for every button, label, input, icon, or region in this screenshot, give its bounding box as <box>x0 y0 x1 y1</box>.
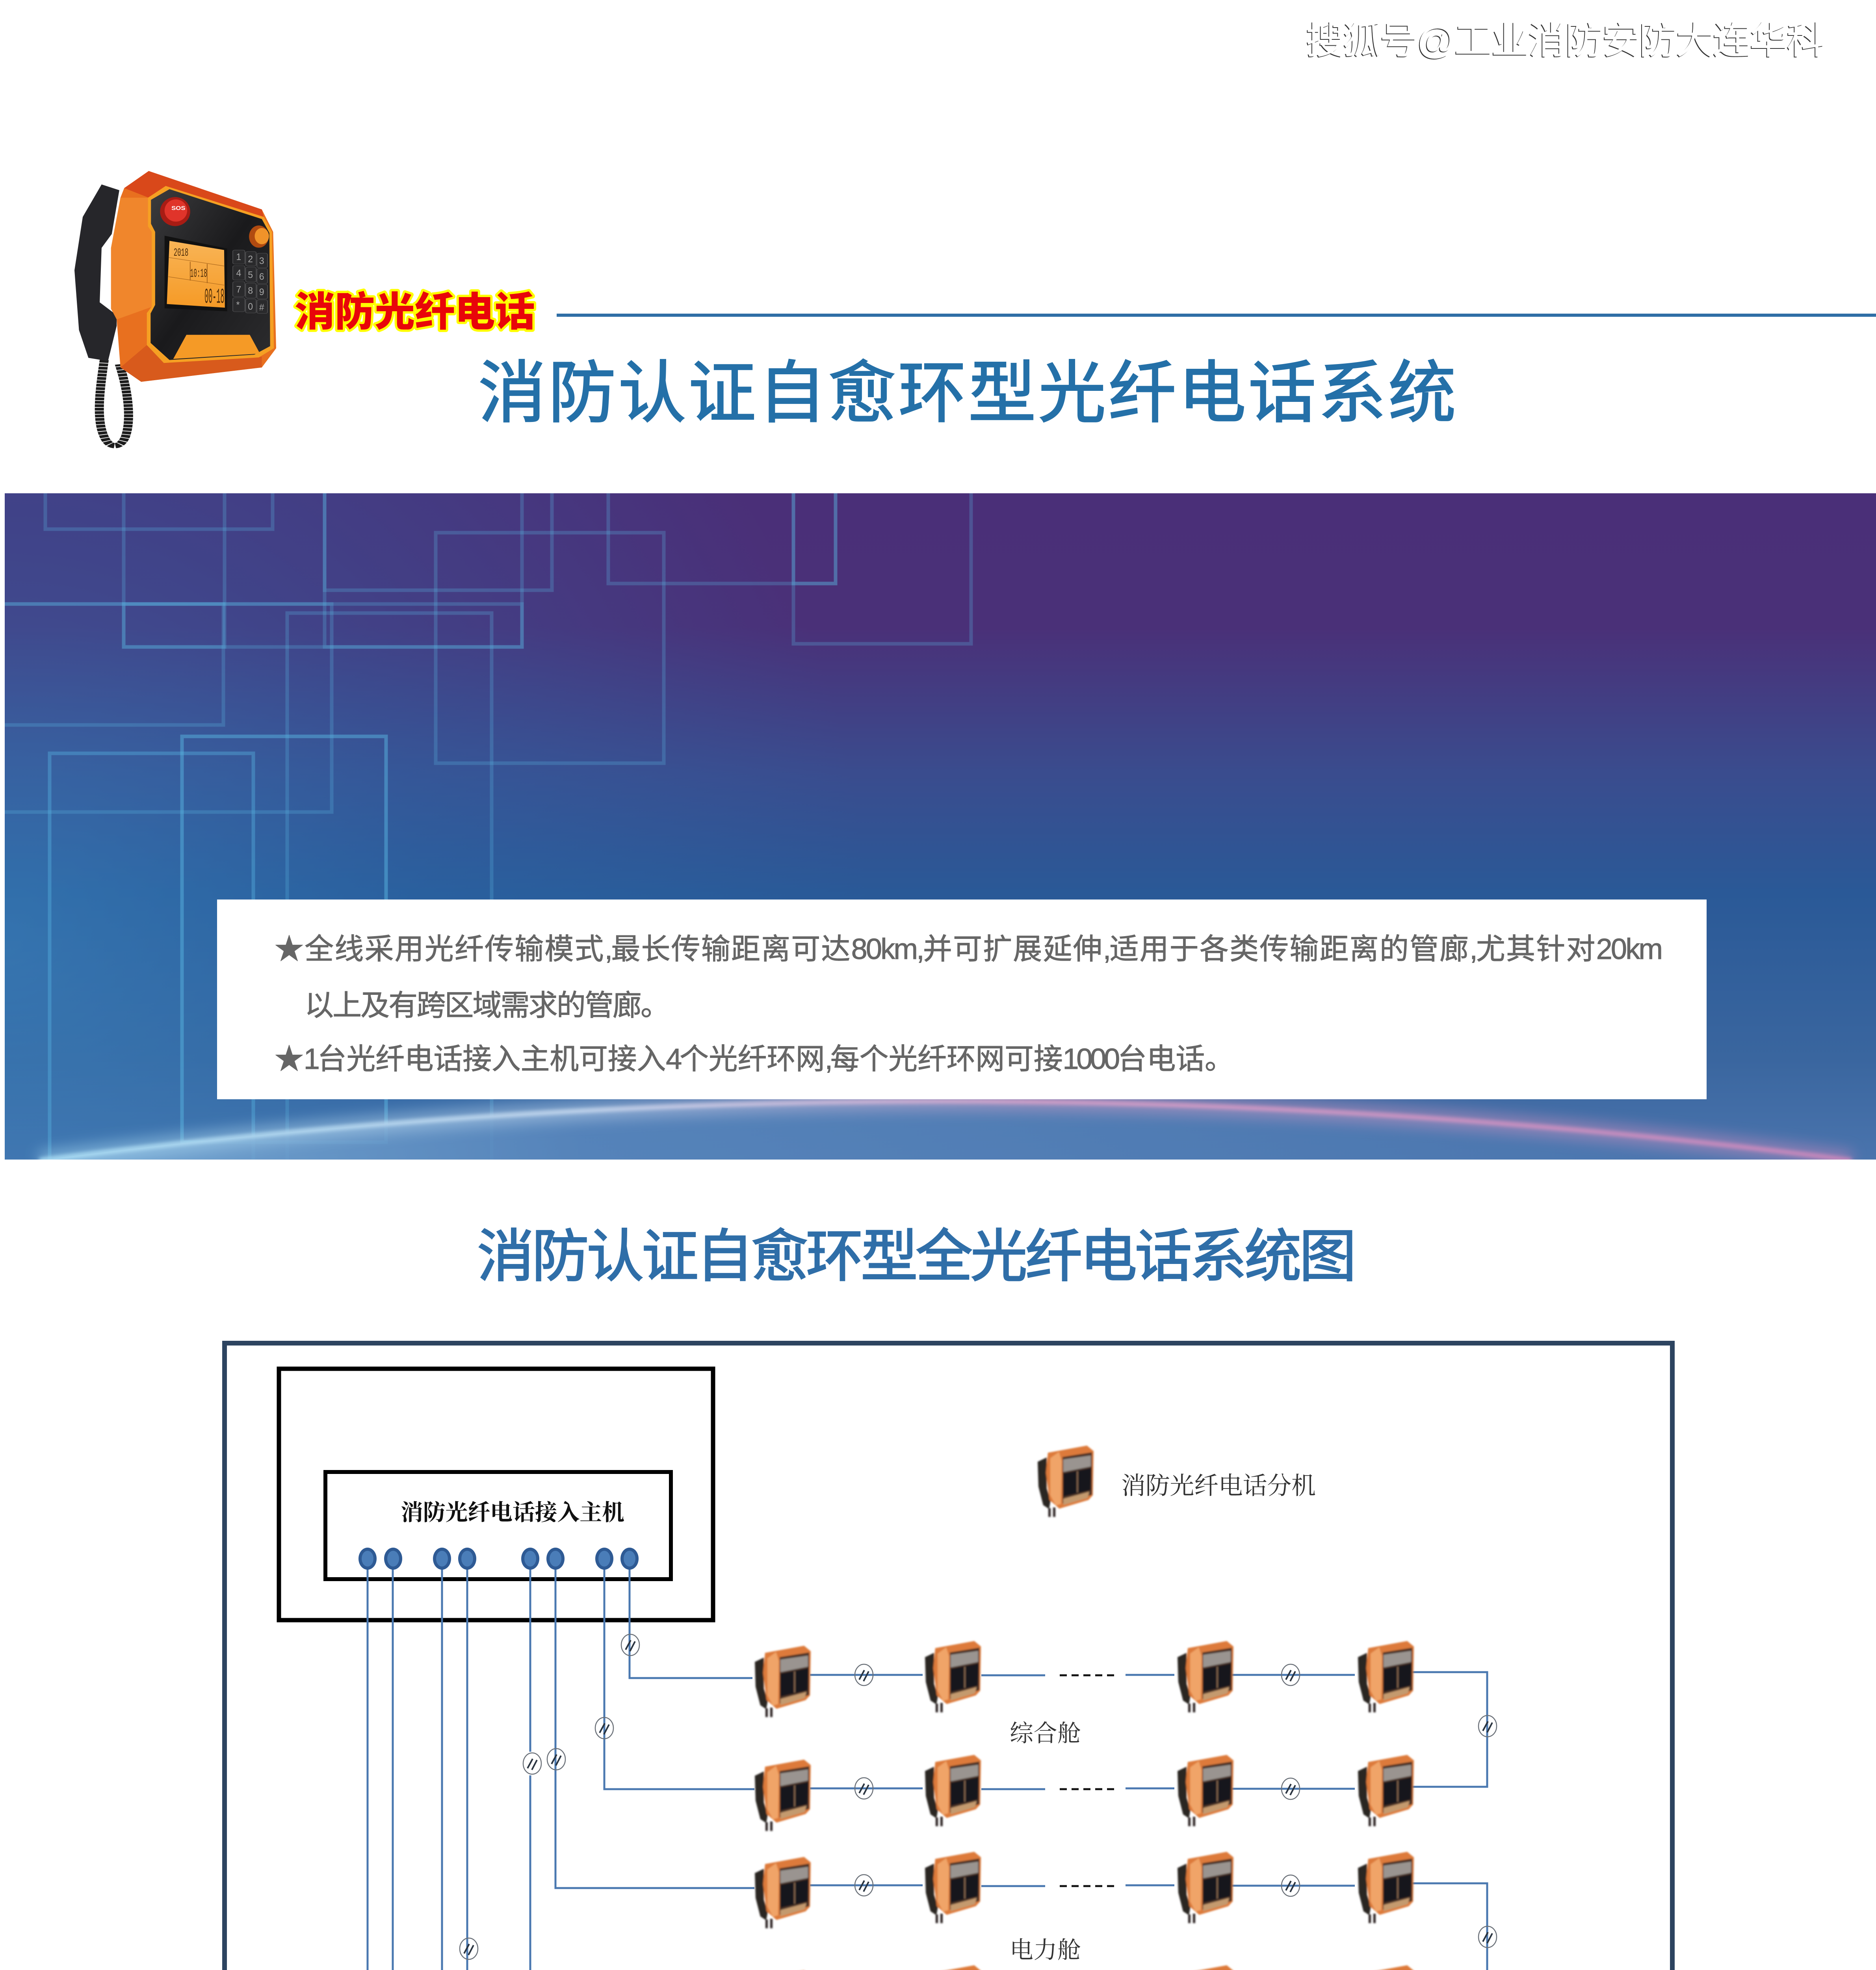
keypad: 9 <box>259 287 264 297</box>
legend: label: 消防光纤电话分机 <box>1121 1473 1316 1500</box>
header label: 消防光纤电话 <box>295 290 535 335</box>
line gaps behind breaks <box>364 1752 533 1970</box>
handset <box>74 184 119 361</box>
SOS button: SOS <box>171 205 185 212</box>
phones: row 1 <box>755 1641 1414 1717</box>
left colour wash <box>5 493 1876 1160</box>
panel: feature text <box>217 900 1707 1099</box>
keypad: 1 <box>236 252 241 262</box>
host unit <box>325 1472 671 1579</box>
black brushed panel <box>150 189 270 360</box>
text card <box>217 900 1707 1099</box>
LCD screen: 2018 <box>174 247 188 259</box>
keypad: 8 <box>248 285 253 296</box>
phone body <box>111 171 276 382</box>
orange trim <box>147 186 274 363</box>
feature line 2: 以上及有跨区域需求的管廊。 <box>305 989 670 1022</box>
feeder lines <box>368 1560 754 1970</box>
diagram frame <box>225 1343 1672 1970</box>
panel: banner <box>0 489 1876 1173</box>
coiled cord <box>99 360 128 446</box>
bottom tab <box>173 335 260 359</box>
fibre ports <box>358 1548 639 1570</box>
title: 消防认证自愈环型光纤电话系统 <box>478 355 1456 431</box>
feature line 3: ★1台光纤电话接入主机可接入4个光纤环网,每个光纤环网可接1000台电话。 <box>275 1043 1234 1075</box>
section heading: 消防认证自愈环型全光纤电话系统图 <box>477 1225 1356 1288</box>
keypad <box>233 250 267 314</box>
keypad: 4 <box>236 268 241 278</box>
LCD screen frame <box>165 236 227 311</box>
host label: 消防光纤电话接入主机 <box>401 1500 624 1525</box>
banner background <box>5 493 1876 1160</box>
keypad: 5 <box>248 269 253 280</box>
LCD screen: 10:18 <box>190 267 207 281</box>
side highlight <box>111 198 154 320</box>
label: power cabin: 电力舱 <box>1010 1937 1081 1963</box>
top facet <box>124 171 264 217</box>
legend: phone icon <box>1038 1446 1094 1517</box>
LCD screen: 00-18 <box>204 286 224 310</box>
phones: row 4 <box>755 1965 1414 1970</box>
fibre break symbols <box>360 1634 1497 1970</box>
phones: row 3 <box>755 1852 1414 1928</box>
phones: row 2 <box>755 1755 1414 1831</box>
keypad: * <box>236 299 240 310</box>
keypad: 7 <box>236 284 241 295</box>
feature line 1: ★全线采用光纤传输模式,最长传输距离可达80km,并可扩展延伸,适用于各类传输距离的管廊,尤其针对20km <box>275 933 1661 965</box>
lower facet <box>121 345 262 382</box>
keypad: # <box>259 302 264 312</box>
keypad: 3 <box>259 255 264 266</box>
dashed continuation marks <box>1060 1675 1114 1970</box>
LCD screen <box>167 241 225 310</box>
orange knob <box>249 225 269 248</box>
SOS button <box>160 197 190 226</box>
header rule <box>557 314 1876 317</box>
horizon arc <box>39 1101 1852 1160</box>
ring closures <box>1412 1672 1487 1970</box>
keypad: 6 <box>259 271 264 282</box>
panel: system diagram <box>225 1343 1672 1970</box>
host cabinet <box>279 1369 713 1620</box>
keypad: 2 <box>248 254 253 264</box>
watermark: 搜狐号@工业消防安防大连华科 <box>1306 20 1824 62</box>
row connecting lines <box>810 1675 1355 1970</box>
icon: large fire fibre telephone <box>74 171 276 446</box>
label: comprehensive cabin: 综合舱 <box>1010 1721 1081 1747</box>
keypad: 0 <box>248 301 253 312</box>
